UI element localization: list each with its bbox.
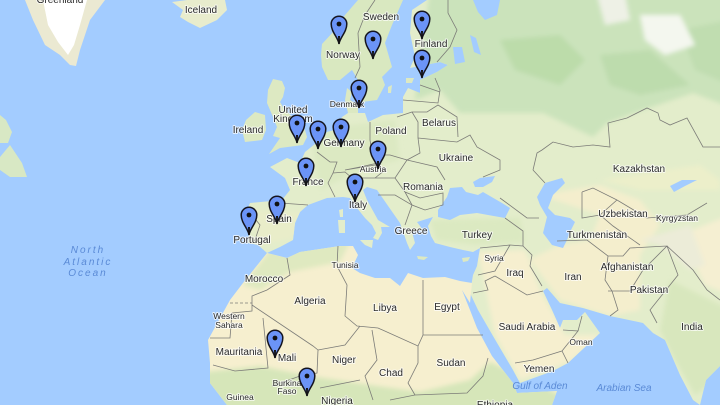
marker: Austria: [370, 141, 386, 169]
marker: Portugal: [241, 207, 257, 235]
country labels: Libya: [373, 303, 397, 314]
land: Great Britain: [267, 79, 307, 154]
country labels: Yemen: [524, 364, 554, 375]
water labels: Ocean: [68, 268, 108, 279]
country labels: Burkina: [273, 378, 302, 388]
marker: Germany: [333, 119, 349, 147]
country labels: Poland: [375, 126, 407, 137]
country labels: Kazakhstan: [613, 164, 665, 175]
country labels: Uzbekistan: [598, 209, 648, 220]
country labels: Niger: [332, 355, 357, 366]
country labels: Italy: [349, 200, 367, 211]
marker: Norway: [331, 16, 347, 44]
country labels: Syria: [484, 253, 504, 263]
country labels: Western: [213, 311, 245, 321]
country labels: Greece: [395, 226, 428, 237]
country labels: Ireland: [233, 125, 263, 136]
country labels: India: [681, 322, 703, 333]
country labels: Chad: [379, 368, 403, 379]
country labels: Mali: [278, 353, 296, 364]
country labels: Faso: [278, 386, 297, 396]
country labels: Sweden: [363, 12, 399, 23]
land: Newfoundland and Labrador: [0, 115, 27, 177]
country labels: Pakistan: [630, 285, 668, 296]
marker: Italy: [347, 174, 363, 202]
seas and islands: [338, 0, 697, 262]
country labels: Guinea: [226, 392, 254, 402]
land: Ireland: [242, 112, 266, 142]
country labels: Iran: [564, 272, 582, 283]
land: Denmark: [345, 88, 358, 113]
country labels: Denmark: [330, 99, 365, 109]
country labels: Egypt: [434, 302, 460, 313]
water labels: Atlantic: [63, 257, 112, 268]
country labels: Germany: [323, 138, 365, 149]
country labels: Turkmenistan: [567, 230, 627, 241]
water labels: [63, 245, 652, 394]
marker: United Kingdom: [289, 115, 305, 143]
land: Africa: [200, 242, 560, 405]
country labels: United: [279, 105, 307, 116]
country labels: Iceland: [185, 5, 217, 16]
markers: [241, 11, 430, 396]
water labels: Gulf of Aden: [512, 381, 568, 392]
land: Scandinavia: [321, 0, 403, 102]
marker: Sweden: [365, 31, 381, 59]
marker: Finland north: [414, 11, 430, 39]
country labels: Kingdom: [273, 114, 313, 125]
country labels: Spain: [266, 214, 292, 225]
country labels: Kyrgyzstan: [656, 213, 698, 223]
marker: France: [298, 158, 314, 186]
land: Iceland: [172, 0, 227, 28]
country labels: Mauritania: [216, 347, 263, 358]
country labels: Sahara: [215, 320, 243, 330]
country labels: Morocco: [245, 274, 284, 285]
country labels: Portugal: [233, 235, 271, 246]
country borders: [210, 0, 720, 400]
country labels: Oman: [569, 337, 593, 347]
country labels: Tunisia: [331, 260, 359, 270]
water labels: Arabian Sea: [595, 383, 652, 394]
country labels: Norway: [326, 50, 360, 61]
label: North Atlantic Ocean: North: [71, 245, 105, 256]
marker: Mali: [267, 330, 283, 358]
country labels: Afghanistan: [601, 262, 653, 273]
marker: Spain: [269, 196, 285, 224]
country labels: Turkey: [462, 230, 492, 241]
country labels: Finland: [415, 39, 447, 50]
marker: Burkina Faso: [299, 368, 315, 396]
country labels: Austria: [360, 164, 386, 174]
marker: Finland south: [414, 50, 430, 78]
country labels: Iraq: [506, 268, 524, 279]
country labels: Romania: [403, 182, 443, 193]
country labels: France: [292, 177, 324, 188]
country labels: Sudan: [437, 358, 465, 369]
land: Eurasia: [247, 0, 720, 405]
country labels: Belarus: [422, 118, 456, 129]
country labels: Algeria: [294, 296, 326, 307]
marker: Belgium: [310, 121, 326, 149]
country labels: Saudi Arabia: [499, 322, 556, 333]
land: Greenland: [25, 0, 105, 66]
marker: Denmark: [351, 80, 367, 108]
country labels: Ukraine: [439, 153, 474, 164]
